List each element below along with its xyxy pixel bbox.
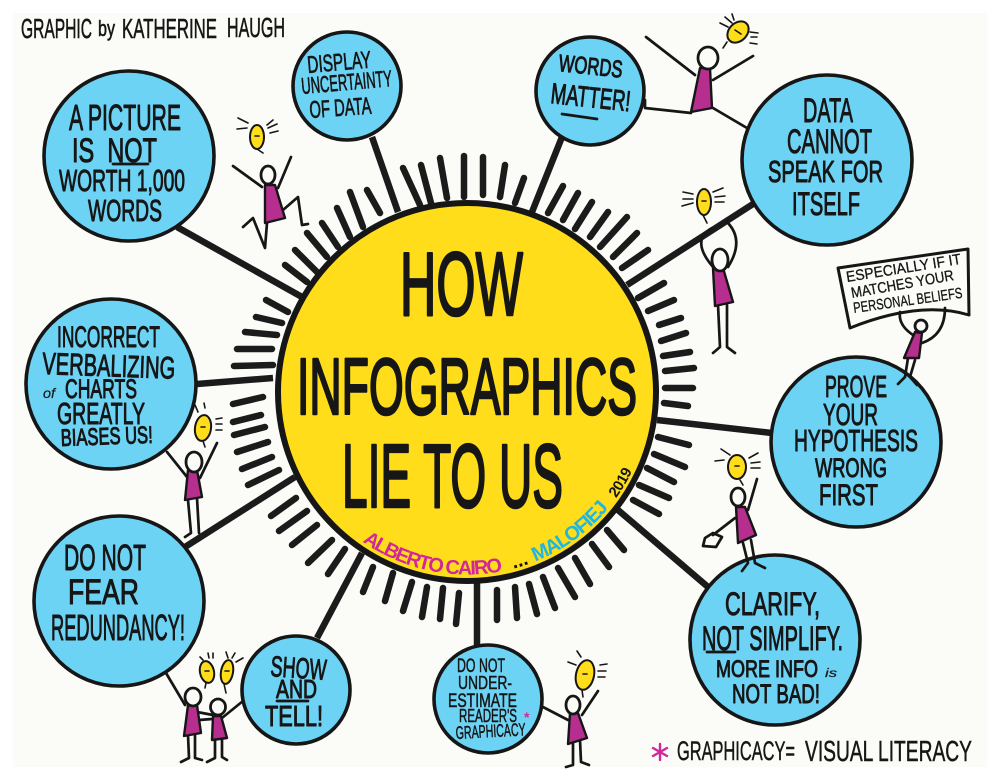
circle: a picture is not worth 1,000 words: WORDS — [88, 193, 162, 228]
footnote: graphicacy equals visual literacy: GRAPHICACY= — [677, 736, 795, 766]
banner: especially if it matches your personal beliefs: ESPECIALLY IF IT — [845, 251, 962, 286]
circle: incorrect verbalizing of charts greatly biases us: VERBALIZING — [42, 346, 176, 386]
circle: clarify, not simplify — [690, 555, 860, 725]
circle: data cannot speak for itself — [742, 75, 912, 245]
figure: person between words matter and data circles — [645, 14, 758, 128]
byline on arc: ALBERTO CAIRO — [362, 533, 501, 575]
spokes connecting circles to the sun — [177, 137, 772, 647]
circle: incorrect verbalizing of charts greatly biases us: CHARTS — [65, 374, 137, 404]
circle: incorrect verbalizing of charts greatly biases us: BIASES US! — [60, 422, 153, 452]
circle: do not fear redundancy — [34, 516, 204, 686]
sun ray ticks — [233, 156, 694, 624]
figure: person under incorrect verbalizing circle — [167, 403, 222, 537]
figure: person holding banner — [838, 249, 969, 385]
credit line: KATHERINE — [122, 13, 217, 44]
title — [297, 235, 637, 527]
circle: do not fear redundancy: REDUNDANCY! — [51, 607, 185, 648]
circle: a picture is not worth 1,000 words: A PICTURE — [69, 97, 181, 138]
circle: display uncertainty of data: UNCERTAINTY — [300, 65, 393, 99]
figure: person by underestimate circle — [543, 651, 607, 767]
circle: data cannot speak for itself: CANNOT — [787, 123, 872, 161]
circle: prove your hypothesis wrong first: HYPOTHESIS — [794, 423, 918, 458]
circle: prove your hypothesis wrong first: YOUR — [823, 397, 878, 432]
banner: especially if it matches your personal beliefs: PERSONAL BELIEFS — [852, 285, 963, 317]
circle: prove your hypothesis wrong first: PROVE — [825, 369, 887, 404]
figure: person with shovel on clarify circle — [703, 449, 765, 571]
circle: do not underestimate reader's graphicacy: DO NOT — [457, 656, 505, 677]
circle: incorrect verbalizing of charts greatly biases us — [26, 299, 196, 469]
credit line — [21, 12, 285, 44]
circle: show and tell: SHOW — [270, 651, 328, 687]
circle: clarify, not simplify: NOT BAD! — [732, 679, 820, 709]
byline on arc: MALOFIEJ — [530, 500, 606, 562]
circle: do not underestimate reader's graphicacy: * — [524, 709, 530, 725]
circle: show and tell: TELL! — [265, 701, 323, 733]
circle: display uncertainty of data: OF DATA — [309, 93, 372, 124]
banner: especially if it matches your personal beliefs — [838, 249, 969, 328]
circle: a picture is not worth 1,000 words: IS NOT — [72, 132, 157, 170]
title: HOW — [400, 235, 523, 335]
circle: data cannot speak for itself: SPEAK FOR — [768, 154, 883, 189]
circle: do not underestimate reader's graphicacy — [434, 645, 542, 753]
circle: do not fear redundancy: FEAR — [68, 573, 139, 612]
circle: clarify, not simplify: is — [825, 666, 837, 680]
circle: do not fear redundancy: DO NOT — [64, 537, 146, 578]
title: LIE TO US — [342, 427, 563, 527]
circle: data cannot speak for itself: ITSELF — [792, 186, 860, 222]
credit line: by — [98, 16, 115, 41]
circle: clarify, not simplify: MORE INFO — [716, 656, 818, 683]
byline on arc — [362, 468, 631, 575]
circle: incorrect verbalizing of charts greatly biases us: INCORRECT — [57, 321, 160, 354]
figure: jumping person with lightbulb — [233, 118, 308, 248]
banner: especially if it matches your personal beliefs: MATCHES YOUR — [850, 267, 955, 302]
circle: words matter — [536, 37, 644, 145]
credit line: HAUGH — [227, 12, 285, 43]
circle: data cannot speak for itself: DATA — [803, 92, 853, 130]
circle: show and tell — [242, 636, 350, 744]
icon: magenta asterisk — [653, 744, 667, 760]
title: INFOGRAPHICS — [297, 342, 637, 431]
byline on arc: 2019 — [609, 468, 631, 498]
footnote: graphicacy equals visual literacy — [653, 736, 972, 768]
circle: a picture is not worth 1,000 words — [44, 71, 214, 241]
circle: prove your hypothesis wrong first: WRONG — [815, 453, 887, 483]
circle: incorrect verbalizing of charts greatly biases us: GREATLY — [57, 396, 145, 431]
figure: two people with lightbulbs — [166, 652, 243, 762]
circle: a picture is not worth 1,000 words: WORTH 1,000 — [59, 163, 185, 198]
central sun with title — [275, 200, 659, 584]
circle: incorrect verbalizing of charts greatly biases us: of — [43, 385, 57, 401]
circle: do not underestimate reader's graphicacy: GRAPHICACY — [455, 719, 526, 743]
circle: display uncertainty of data — [293, 32, 401, 140]
circle: do not underestimate reader's graphicacy: ESTIMATE — [448, 691, 517, 712]
circle: do not underestimate reader's graphicacy: UNDER- — [458, 673, 512, 693]
circle: words matter: MATTER! — [549, 78, 632, 118]
circle: show and tell: AND — [276, 674, 317, 704]
byline on arc: ... — [514, 562, 528, 568]
circle: words matter: WORDS — [557, 50, 624, 84]
circle: display uncertainty of data: DISPLAY — [306, 47, 372, 79]
circle: do not underestimate reader's graphicacy: READER'S — [459, 706, 517, 726]
circle: clarify, not simplify: NOT SIMPLIFY. — [702, 620, 843, 658]
circle: prove your hypothesis wrong first — [771, 357, 941, 527]
figure: person hanging from data spoke — [682, 188, 736, 353]
circle: prove your hypothesis wrong first: FIRST — [819, 479, 878, 512]
credit line: GRAPHIC — [21, 13, 92, 44]
circle: clarify, not simplify: CLARIFY, — [725, 586, 820, 622]
